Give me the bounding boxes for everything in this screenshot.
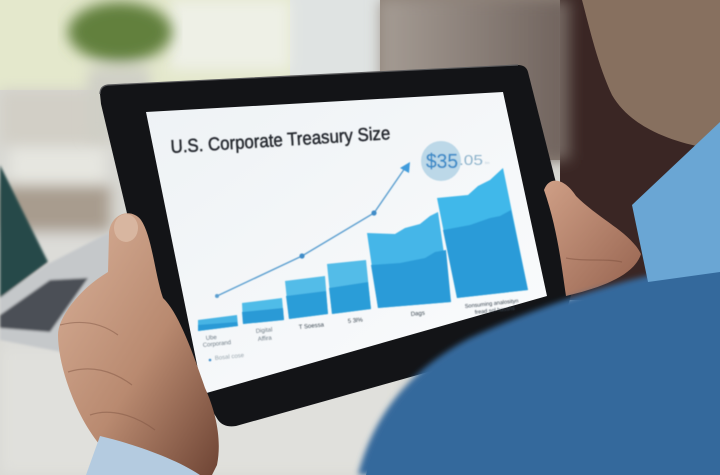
shirt cuff at left wrist [86, 436, 200, 475]
tablet body [100, 65, 578, 426]
axis labels: Dags [411, 311, 425, 318]
trend line with arrow [215, 162, 410, 298]
tablet rim highlight [100, 65, 518, 94]
value badge: .05 [459, 152, 483, 169]
blurred laptop at left [0, 165, 110, 352]
finger creases [60, 322, 155, 430]
blue shirt shoulder and arm [358, 122, 720, 475]
axis labels: T Soessa [299, 322, 325, 331]
thumbnail [114, 214, 138, 242]
axis labels: Digital [256, 327, 273, 335]
axis labels: Affira [258, 336, 273, 343]
tablet screen [146, 92, 547, 394]
value badge [421, 141, 489, 181]
axis labels: Sonsuming analosityn [465, 298, 519, 310]
axis labels [203, 298, 519, 362]
chart on tablet screen [170, 122, 528, 362]
axis labels: 5 3l% [348, 317, 364, 325]
axis labels: fread sol hasshs [475, 306, 515, 316]
person's blurred face [582, 0, 720, 150]
right hand fingers on the tablet [544, 181, 641, 296]
title: U.S. Corporate Treasury Size [170, 122, 391, 157]
axis labels: Bosal cose [215, 353, 245, 362]
axis labels: Ube [206, 335, 218, 342]
bars [198, 168, 528, 331]
value badge: $35 [426, 151, 458, 173]
axis labels: Corporand [203, 340, 231, 349]
left hand holding the tablet [58, 213, 219, 475]
value badge: bn [485, 160, 489, 165]
blurred potted plant [68, 2, 172, 138]
